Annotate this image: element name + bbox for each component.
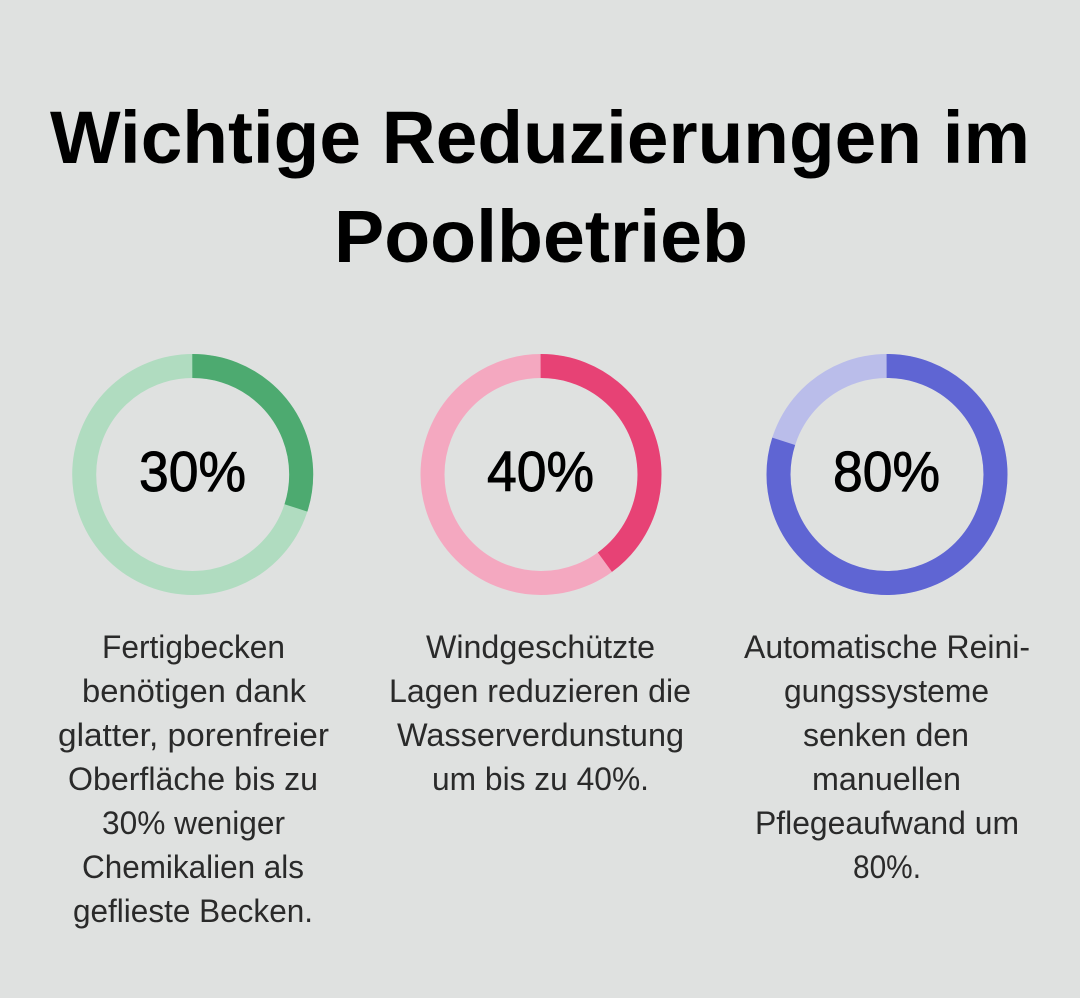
text block: windschutz: Windgeschützte (426, 629, 655, 665)
panel: 30% fertigbecken (58, 366, 329, 929)
text block: reinigung: Automatische Reini- (744, 629, 1030, 665)
text block: reinigung: manuellen (812, 761, 961, 797)
text block: reinigung: Pflegeaufwand um (755, 805, 1019, 841)
donut chart: 80% (778, 366, 996, 583)
title (50, 96, 1030, 278)
text block: windschutz: um bis zu 40%. (432, 761, 649, 797)
text block: fertigbecken: Fertigbecken (102, 629, 285, 665)
text block: reinigung (744, 629, 1030, 885)
text block: windschutz: Lagen reduzieren die (389, 673, 691, 709)
text block: fertigbecken: glatter, porenfreier (58, 717, 329, 753)
panel: 40% windschutz (389, 366, 691, 797)
text block: reinigung: gungssysteme (784, 673, 989, 709)
donut chart: 30%: 30% (139, 440, 246, 504)
text block: fertigbecken: Chemikalien als (82, 849, 304, 885)
donut chart: 30% (84, 366, 301, 583)
text block: fertigbecken (58, 629, 329, 929)
donut chart: 40% (432, 366, 650, 583)
text block: fertigbecken: geflieste Becken. (73, 893, 313, 929)
title: Poolbetrieb (334, 195, 748, 278)
text block: fertigbecken: benötigen dank (82, 673, 307, 709)
text block: fertigbecken: Oberfläche bis zu (68, 761, 318, 797)
panel: 80% reinigung (744, 366, 1030, 885)
text block: windschutz (389, 629, 691, 797)
donut chart: 80%: 80% (833, 440, 940, 504)
title: Wichtige Reduzierungen im (50, 96, 1030, 179)
donut chart: 40%: 40% (487, 440, 594, 504)
text block: fertigbecken: 30% weniger (102, 805, 285, 841)
text block: windschutz: Wasserverdunstung (397, 717, 684, 753)
text block: reinigung: senken den (803, 717, 969, 753)
text block: reinigung: 80%. (853, 849, 921, 885)
